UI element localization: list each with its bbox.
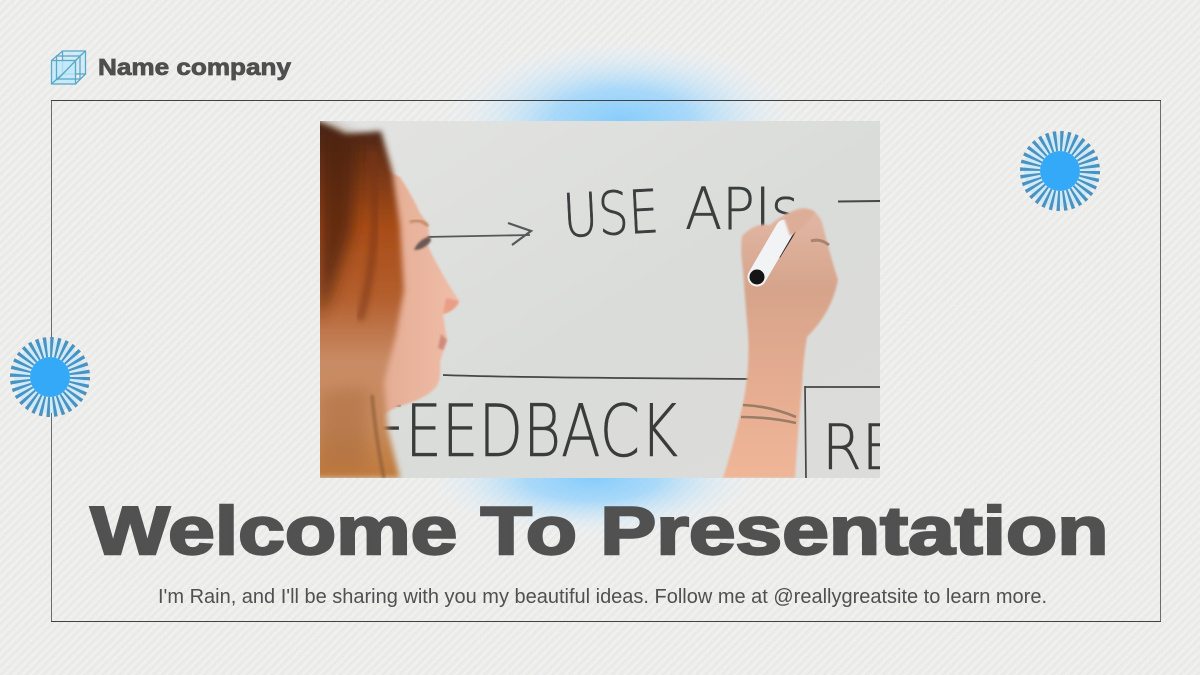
- neck and face: [381, 172, 460, 414]
- handwriting: FEEDBACK: FEEDBACK: [372, 389, 678, 473]
- handwriting: APIs: APIs: [685, 175, 799, 243]
- logo icon: wireframe cubes: [52, 51, 86, 84]
- bracelets: [741, 405, 796, 423]
- whiteboard: [320, 121, 880, 478]
- marker: [750, 229, 793, 284]
- starburst right: [1024, 135, 1096, 207]
- handwriting: USE: USE: [561, 177, 661, 252]
- starburst left: [14, 341, 86, 413]
- fingers over marker: [784, 210, 815, 236]
- company name: Name company: [98, 54, 291, 80]
- handwriting: RE: RE: [822, 411, 898, 484]
- title: Welcome To Presentation: [90, 494, 1108, 569]
- lower whiteboard lines: [443, 201, 880, 478]
- ring: [811, 240, 829, 245]
- subtitle: I'm Rain, and I'll be sharing with you my beautiful ideas. Follow me at @reallygreatsite to learn more.: [158, 586, 1047, 608]
- arrow on whiteboard: [425, 223, 531, 245]
- bottom blue glow: [427, 420, 757, 536]
- frame: [51, 100, 1161, 622]
- hair: [312, 118, 404, 478]
- photo: woman writing on whiteboard: [312, 118, 898, 484]
- arm and hand: [723, 208, 838, 478]
- top blue glow: [447, 40, 797, 204]
